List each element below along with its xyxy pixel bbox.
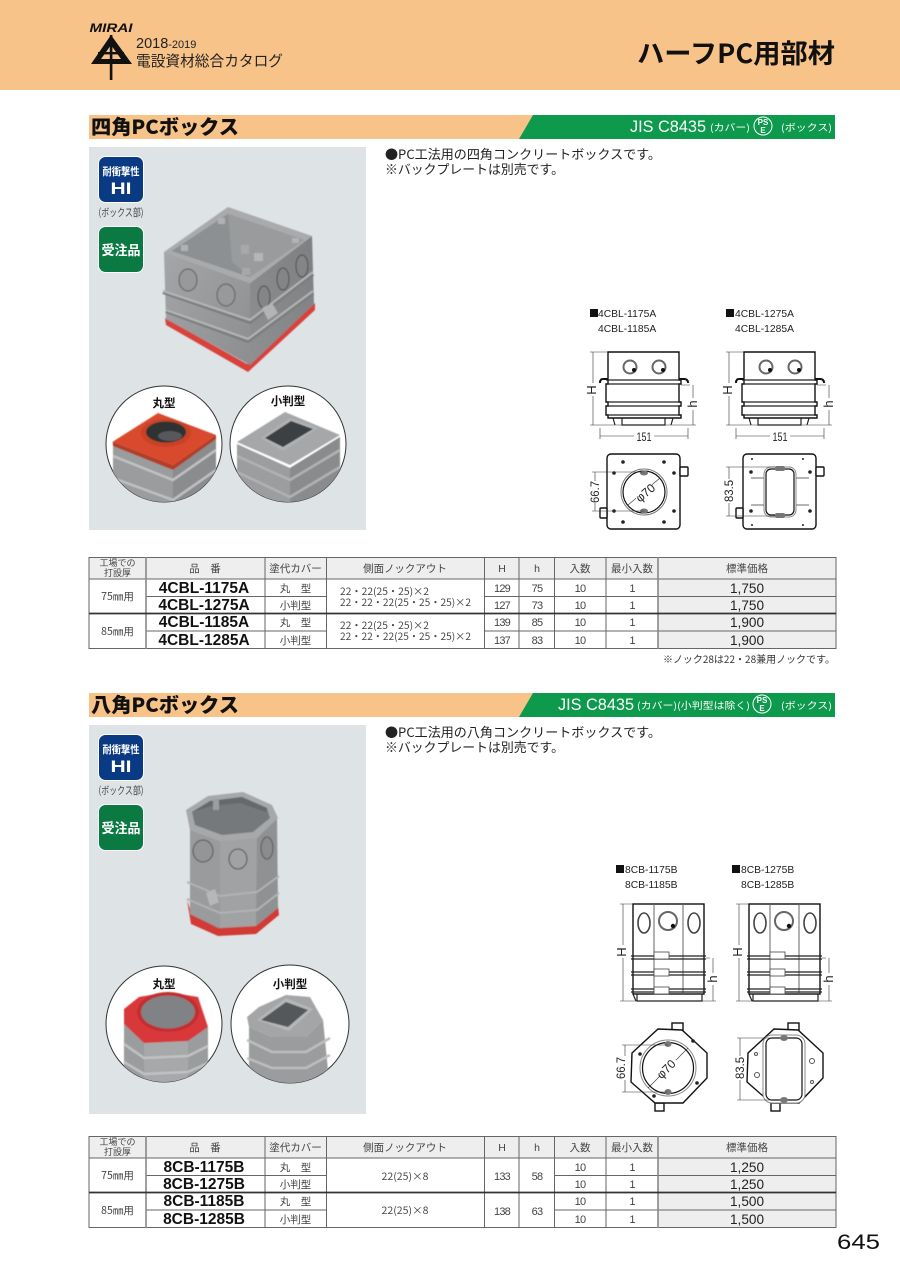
section heading: 四角PCボックス xyxy=(91,111,239,140)
dimension and quantity values: 10 xyxy=(575,1162,586,1174)
knockout specs: 22・22・22(25・25・25)×2 xyxy=(340,594,471,609)
model numbers: 8CB-1285B xyxy=(163,1211,245,1228)
inset label: 丸型 xyxy=(152,976,176,992)
JIS standard: JIS C8435 xyxy=(558,696,634,714)
cover types: 丸 型 xyxy=(280,1160,311,1175)
table header row: 最小入数 xyxy=(611,561,653,576)
model numbers: 4CBL-1285A xyxy=(158,632,250,649)
dimension and quantity values: 137 xyxy=(494,635,511,647)
dimension and quantity values: 138 xyxy=(494,1206,511,1218)
prices: 1,500 xyxy=(730,1212,764,1227)
dimension and quantity values: 10 xyxy=(575,635,586,647)
table header row: 打設厚 xyxy=(104,566,131,579)
dimension and quantity values: 133 xyxy=(494,1171,511,1183)
table header row xyxy=(89,556,836,579)
model labels 2: 8CB-1275B xyxy=(741,865,794,876)
dimension and quantity values xyxy=(494,1162,635,1226)
table header row: 最小入数 xyxy=(611,1140,653,1155)
cover types: 丸 型 xyxy=(280,1194,311,1209)
cover types: 丸 型 xyxy=(280,615,311,630)
diagram: front view 4CBL oval: 151 xyxy=(772,430,788,444)
badge: impact resistance HI xyxy=(98,156,144,202)
PSE mark xyxy=(753,695,771,713)
table header row: 側面ノックアウト xyxy=(363,1140,447,1155)
dimension and quantity values: 10 xyxy=(575,600,586,612)
model numbers xyxy=(163,1159,245,1228)
cover types xyxy=(280,581,311,648)
table header row: 品 番 xyxy=(189,1140,221,1155)
table header row: 工場での xyxy=(99,556,136,569)
diagram: front view 4CBL oval: H xyxy=(720,385,735,395)
prices: 1,900 xyxy=(730,615,764,630)
knockout specs xyxy=(340,583,471,643)
table header row: 標準価格 xyxy=(726,561,768,576)
prices xyxy=(730,1160,764,1227)
prices: 1,750 xyxy=(730,581,764,596)
dimension and quantity values: 75 xyxy=(532,583,543,595)
cover note: (カバー)(小判型は除く) xyxy=(637,698,750,712)
diagram: front view 4CBL round: h xyxy=(685,400,700,408)
dimension and quantity values: 1 xyxy=(629,1196,635,1208)
dimension and quantity values: 1 xyxy=(629,1179,635,1191)
product photo panel 2 xyxy=(89,725,366,1114)
table header row: H xyxy=(498,563,506,575)
PSE mark: PS xyxy=(758,118,769,127)
thickness labels: 75㎜用 xyxy=(101,1168,134,1183)
prices: 1,750 xyxy=(730,598,764,613)
diagram: plan view 8CB oval xyxy=(733,1023,823,1111)
table header row: 工場での xyxy=(99,1135,136,1148)
inset: round type xyxy=(106,966,222,1090)
table header row: H xyxy=(498,1142,506,1154)
table header row: h xyxy=(534,1142,540,1154)
badge: made to order xyxy=(98,226,144,272)
dimension and quantity values: 1 xyxy=(629,1214,635,1226)
prices xyxy=(730,581,764,648)
diagram: front view 8CB oval: H xyxy=(730,947,745,957)
diagram: plan view 4CBL oval xyxy=(722,454,824,529)
diagram: plan view 8CB round: 66.7 xyxy=(614,1057,628,1079)
knockout specs: 22・22(25・25)×2 xyxy=(340,617,429,632)
box note: (ボックス) xyxy=(781,120,832,134)
badge: made to order: 受注品 xyxy=(102,817,140,837)
diagram: front view 4CBL oval: h xyxy=(821,400,836,408)
description 2: ●PC工法用の八角コンクリートボックスです。 xyxy=(385,722,661,741)
PSE mark: E xyxy=(760,126,766,135)
table header row: 塗代カバー xyxy=(269,561,322,576)
badge: impact resistance HI: 耐衝撃性 xyxy=(102,742,140,757)
dimension and quantity values: 10 xyxy=(575,1196,586,1208)
dimension and quantity values: 63 xyxy=(532,1206,543,1218)
model labels 1 xyxy=(590,309,794,335)
catalog name: 電設資材総合カタログ xyxy=(136,50,283,71)
model labels 2 xyxy=(616,865,794,891)
prices: 1,250 xyxy=(730,1160,764,1175)
inset: oval type xyxy=(230,386,346,510)
table header row: 入数 xyxy=(570,1140,591,1155)
prices: 1,250 xyxy=(730,1177,764,1192)
table header row xyxy=(89,1135,836,1158)
spec table 2 xyxy=(89,1135,836,1228)
diagram: plan view 8CB round xyxy=(614,1023,707,1111)
section band: 八角PCボックス xyxy=(89,689,835,718)
model numbers: 4CBL-1275A xyxy=(158,597,250,614)
dimension and quantity values: 1 xyxy=(629,600,635,612)
section heading: 八角PCボックス xyxy=(91,689,239,718)
cover types: 小判型 xyxy=(280,1177,311,1192)
diagram: plan view 4CBL round: φ70 xyxy=(633,481,658,505)
JIS standard: JIS C8435 xyxy=(630,118,706,136)
diagram: front view 8CB oval: h xyxy=(821,975,836,983)
diagram: front view 4CBL round: 151 xyxy=(636,430,652,444)
diagram: front view 8CB round: H xyxy=(614,947,629,957)
prices: 1,900 xyxy=(730,633,764,648)
table header row: 品 番 xyxy=(189,561,221,576)
model labels 2: 8CB-1285B xyxy=(741,880,794,891)
prices: 1,500 xyxy=(730,1194,764,1209)
model labels 2: 8CB-1175B xyxy=(625,865,678,876)
description 2 xyxy=(385,722,661,756)
photo: octagonal PC box xyxy=(186,792,279,936)
PSE mark xyxy=(754,117,772,135)
diagram: front view 8CB oval xyxy=(730,904,836,1001)
dimension and quantity values: 127 xyxy=(494,600,511,612)
model labels 2: 8CB-1185B xyxy=(625,880,678,891)
model numbers: 8CB-1185B xyxy=(164,1193,244,1210)
dimension and quantity values: 1 xyxy=(629,583,635,595)
dimension and quantity values: 85 xyxy=(532,617,543,629)
table header row: 塗代カバー xyxy=(269,1140,322,1155)
inset: oval type xyxy=(231,965,349,1090)
box note: (ボックス) xyxy=(781,698,832,712)
dimension and quantity values: 10 xyxy=(575,1179,586,1191)
dimension and quantity values xyxy=(494,583,635,647)
model numbers: 4CBL-1185A xyxy=(159,614,249,631)
dimension and quantity values: 58 xyxy=(532,1171,543,1183)
badge: impact resistance HI: HI xyxy=(110,757,132,776)
cover types: 小判型 xyxy=(280,633,311,648)
model labels 1: 4CBL-1275A xyxy=(735,309,794,320)
diagram: plan view 4CBL oval: 83.5 xyxy=(722,480,736,502)
knockout specs: 22・22(25・25)×2 xyxy=(340,583,429,598)
logo: MIRAI mark: MIRAI xyxy=(90,21,133,35)
table header row: 打設厚 xyxy=(104,1145,131,1158)
model numbers: 8CB-1275B xyxy=(163,1176,245,1193)
thickness labels: 75㎜用 xyxy=(101,589,134,604)
diagram: front view 4CBL round: H xyxy=(584,385,599,395)
table footnote: ※ノック28は22・28兼用ノックです。 xyxy=(663,651,835,666)
badge: made to order xyxy=(98,804,144,850)
diagram: plan view 4CBL round: 66.7 xyxy=(588,481,602,503)
table header row: 標準価格 xyxy=(726,1140,768,1155)
diagram: front view 4CBL round xyxy=(584,352,700,444)
logo: MIRAI mark xyxy=(90,21,133,80)
model labels 1: 4CBL-1285A xyxy=(735,324,794,335)
PSE mark: PS xyxy=(757,696,768,705)
dimension and quantity values: 73 xyxy=(532,600,543,612)
knockout specs xyxy=(382,1168,429,1217)
page number: 645 xyxy=(837,1231,880,1254)
table header row: 側面ノックアウト xyxy=(363,561,447,576)
dimension and quantity values: 10 xyxy=(575,583,586,595)
description 1: ※バックプレートは別売です。 xyxy=(385,159,564,178)
diagram: front view 8CB round xyxy=(614,904,720,1001)
model numbers xyxy=(158,580,250,649)
description 1 xyxy=(385,144,661,178)
table header row: h xyxy=(534,563,540,575)
model numbers: 8CB-1175B xyxy=(164,1159,244,1176)
section band: 四角PCボックス xyxy=(89,111,835,140)
header band xyxy=(0,0,900,90)
inset label: 小判型 xyxy=(271,393,305,409)
model labels 1: 4CBL-1185A xyxy=(598,324,656,335)
cover types: 小判型 xyxy=(280,1212,311,1227)
catalog year: 2018-2019 xyxy=(136,36,196,52)
badge: impact resistance HI: HI xyxy=(110,179,132,198)
photo: square PC box xyxy=(163,207,315,372)
badge: made to order: 受注品 xyxy=(102,239,140,259)
dimension and quantity values: 1 xyxy=(629,635,635,647)
diagram: front view 4CBL oval xyxy=(720,352,836,444)
model labels 1: 4CBL-1175A xyxy=(598,309,656,320)
cover types: 小判型 xyxy=(280,598,311,613)
table header row: 入数 xyxy=(570,561,591,576)
inset label: 小判型 xyxy=(273,976,307,992)
dimension and quantity values: 10 xyxy=(575,1214,586,1226)
spec table 2: 85㎜用 xyxy=(101,1203,134,1218)
box-part note: (ボックス部) xyxy=(98,783,144,798)
cover note: (カバー) xyxy=(710,120,750,134)
page title: ハーフPC用部材 xyxy=(637,32,835,71)
dimension and quantity values: 139 xyxy=(494,617,511,629)
inset: round type xyxy=(106,386,222,510)
knockout specs: 22(25)×8 xyxy=(382,1202,429,1217)
badge: impact resistance HI xyxy=(98,734,144,780)
product photo panel 1 xyxy=(89,147,366,530)
diagram: plan view 8CB round: φ70 xyxy=(654,1057,679,1082)
description 1: ●PC工法用の四角コンクリートボックスです。 xyxy=(385,144,661,163)
spec table 1: 85㎜用 xyxy=(101,624,134,639)
PSE mark: E xyxy=(759,704,765,713)
spec table 1 xyxy=(89,556,836,649)
description 2: ※バックプレートは別売です。 xyxy=(385,737,564,756)
cover types: 丸 型 xyxy=(280,581,311,596)
badge: impact resistance HI: 耐衝撃性 xyxy=(102,164,140,179)
diagram: plan view 8CB oval: 83.5 xyxy=(733,1057,747,1079)
dimension and quantity values: 1 xyxy=(629,1162,635,1174)
box-part note: (ボックス部) xyxy=(98,205,144,220)
knockout specs: 22(25)×8 xyxy=(382,1168,429,1183)
diagram: front view 8CB round: h xyxy=(705,975,720,983)
knockout specs: 22・22・22(25・25・25)×2 xyxy=(340,628,471,643)
inset label: 丸型 xyxy=(152,395,176,411)
dimension and quantity values: 1 xyxy=(629,617,635,629)
model numbers: 4CBL-1175A xyxy=(159,580,249,597)
dimension and quantity values: 129 xyxy=(494,583,511,595)
cover types xyxy=(280,1160,311,1227)
diagram: plan view 4CBL round xyxy=(588,454,688,529)
dimension and quantity values: 83 xyxy=(532,635,543,647)
dimension and quantity values: 10 xyxy=(575,617,586,629)
